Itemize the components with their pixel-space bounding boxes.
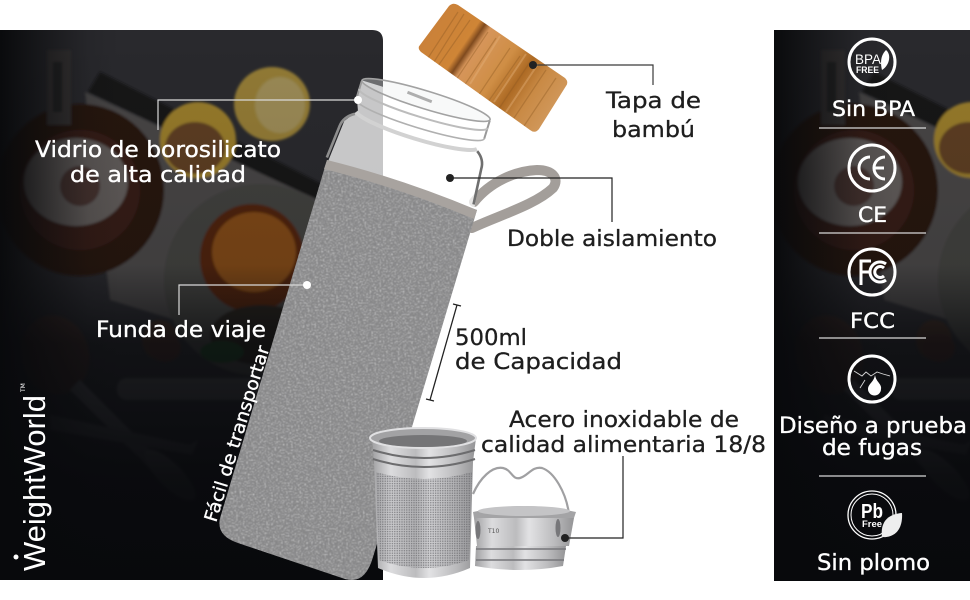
divider label: line after Sin BPA: [819, 127, 926, 129]
logo: WeightWorld: WeightWorld: [17, 395, 52, 571]
panel: right dark photo background: [770, 30, 970, 590]
panel: left dark photo background: [0, 30, 400, 590]
callout: Doble aislamiento: Doble aislamiento: [507, 227, 717, 252]
divider label: line after fugas: [819, 475, 926, 477]
badge: Sin plomo: Pb: [861, 501, 883, 523]
badge: FCC: FCC: [850, 309, 895, 333]
rotated label: Fácil de transportar: Fácil de transportar: [201, 343, 274, 524]
badge: Sin plomo: Free: [862, 519, 882, 529]
callout: 500ml de Capacidad: [426, 304, 622, 401]
callout: Funda de viaje: Funda de viaje: [96, 318, 266, 343]
callout: Tapa de bambú: [529, 61, 701, 143]
logo: WeightWorld: TM: [20, 383, 27, 393]
badge: Diseño a prueba de fugas: de fugas: [822, 436, 922, 461]
callout: Acero inoxidable: calidad alimentaria 18/8: [481, 433, 766, 458]
icon: steel basket with handle: [473, 468, 576, 570]
badge: Diseño a prueba de fugas: [779, 356, 967, 461]
icon: glass bottle top: [325, 69, 503, 209]
callout: Acero inoxidable: Acero inoxidable de: [509, 408, 739, 433]
badge: Sin plomo: Sin plomo: [817, 551, 930, 576]
icon: carry strap: [472, 170, 556, 228]
badge: Sin BPA: [832, 39, 916, 121]
callout: Vidrio de borosilicato: de alta calidad: [70, 163, 246, 188]
icon: steel mesh infuser cylinder: [370, 428, 476, 578]
callout: Vidrio de borosilicato: [35, 96, 362, 188]
callout: Funda de viaje: [96, 281, 311, 343]
icon: steel basket with handle: T10: [487, 528, 499, 535]
badge: CE: CE: [858, 203, 887, 227]
badge: Sin plomo: [817, 491, 930, 576]
icon: bamboo lid: [419, 4, 567, 132]
callout: Acero inoxidable: [481, 408, 766, 542]
badge: FCC: [849, 249, 895, 333]
divider label: line after FCC: [819, 337, 926, 339]
callout: Vidrio de borosilicato: Vidrio de borosilicato: [35, 138, 281, 163]
callout: Tapa de bambú: bambú: [612, 118, 695, 143]
callout: Tapa de bambú: Tapa de: [605, 89, 701, 114]
callout: 500ml de Capacidad: 500ml: [455, 326, 527, 351]
badge: CE: [849, 145, 895, 227]
callout: Doble aislamiento: [446, 174, 717, 252]
badge: Sin BPA: FREE: [856, 65, 879, 76]
badge: Sin BPA: BPA: [855, 51, 882, 67]
badge: Sin BPA: Sin BPA: [832, 97, 916, 121]
divider label: line after CE: [819, 232, 926, 234]
callout: 500ml de Capacidad: de Capacidad: [455, 350, 622, 375]
icon: grey fabric sleeve: [219, 160, 477, 580]
badge: Diseño a prueba de fugas: Diseño a prueba: [779, 414, 967, 439]
